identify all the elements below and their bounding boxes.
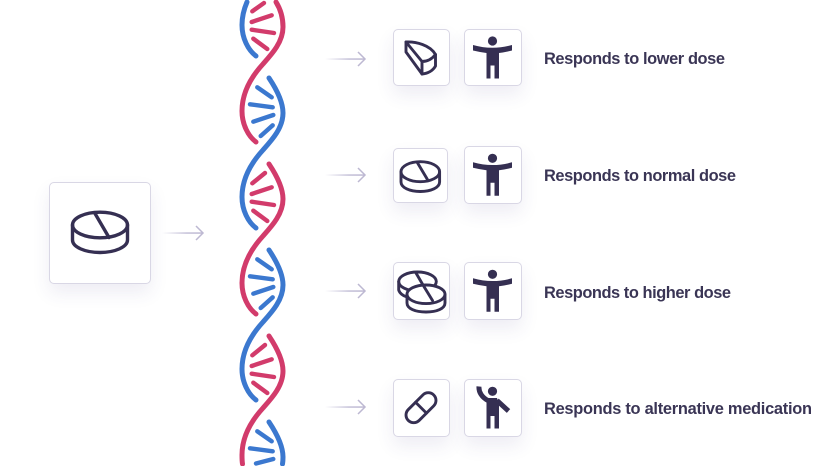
label: lower dose: Responds to lower dose: [544, 50, 725, 68]
icon: two tablets: [399, 272, 445, 312]
label: normal dose: Responds to normal dose: [544, 167, 736, 185]
icon: person arms out: [473, 36, 512, 78]
card: person responding to alternative medication: [464, 379, 522, 437]
icon: person one arm raised: [479, 386, 508, 428]
arrow: to normal dose: [325, 168, 365, 182]
panel: tablet input card: [49, 182, 151, 284]
DNA double helix: [242, 2, 283, 464]
icon: capsule: [403, 390, 439, 426]
icon: person arms out: [473, 270, 512, 312]
label: higher dose: Responds to higher dose: [544, 284, 731, 302]
card: person responding to normal dose: [464, 146, 522, 204]
icon: tablet: [401, 162, 440, 192]
icon: person arms out: [473, 154, 512, 196]
card: partial tablet: [393, 29, 450, 86]
label: alternative medication: Responds to alternative medication: [544, 400, 812, 418]
arrow: to higher dose: [325, 284, 365, 298]
card: two tablets: [393, 262, 450, 320]
card: person responding to lower dose: [464, 29, 522, 86]
arrow: to alternative medication: [325, 400, 365, 414]
icon: tablet: [72, 212, 128, 252]
arrow: tablet to DNA: [162, 226, 203, 240]
card: single tablet: [393, 148, 448, 203]
icon: tablet wedge: [406, 42, 436, 74]
card: capsule: [393, 379, 450, 437]
arrow: to lower dose: [325, 52, 365, 66]
card: person responding to higher dose: [464, 262, 522, 320]
